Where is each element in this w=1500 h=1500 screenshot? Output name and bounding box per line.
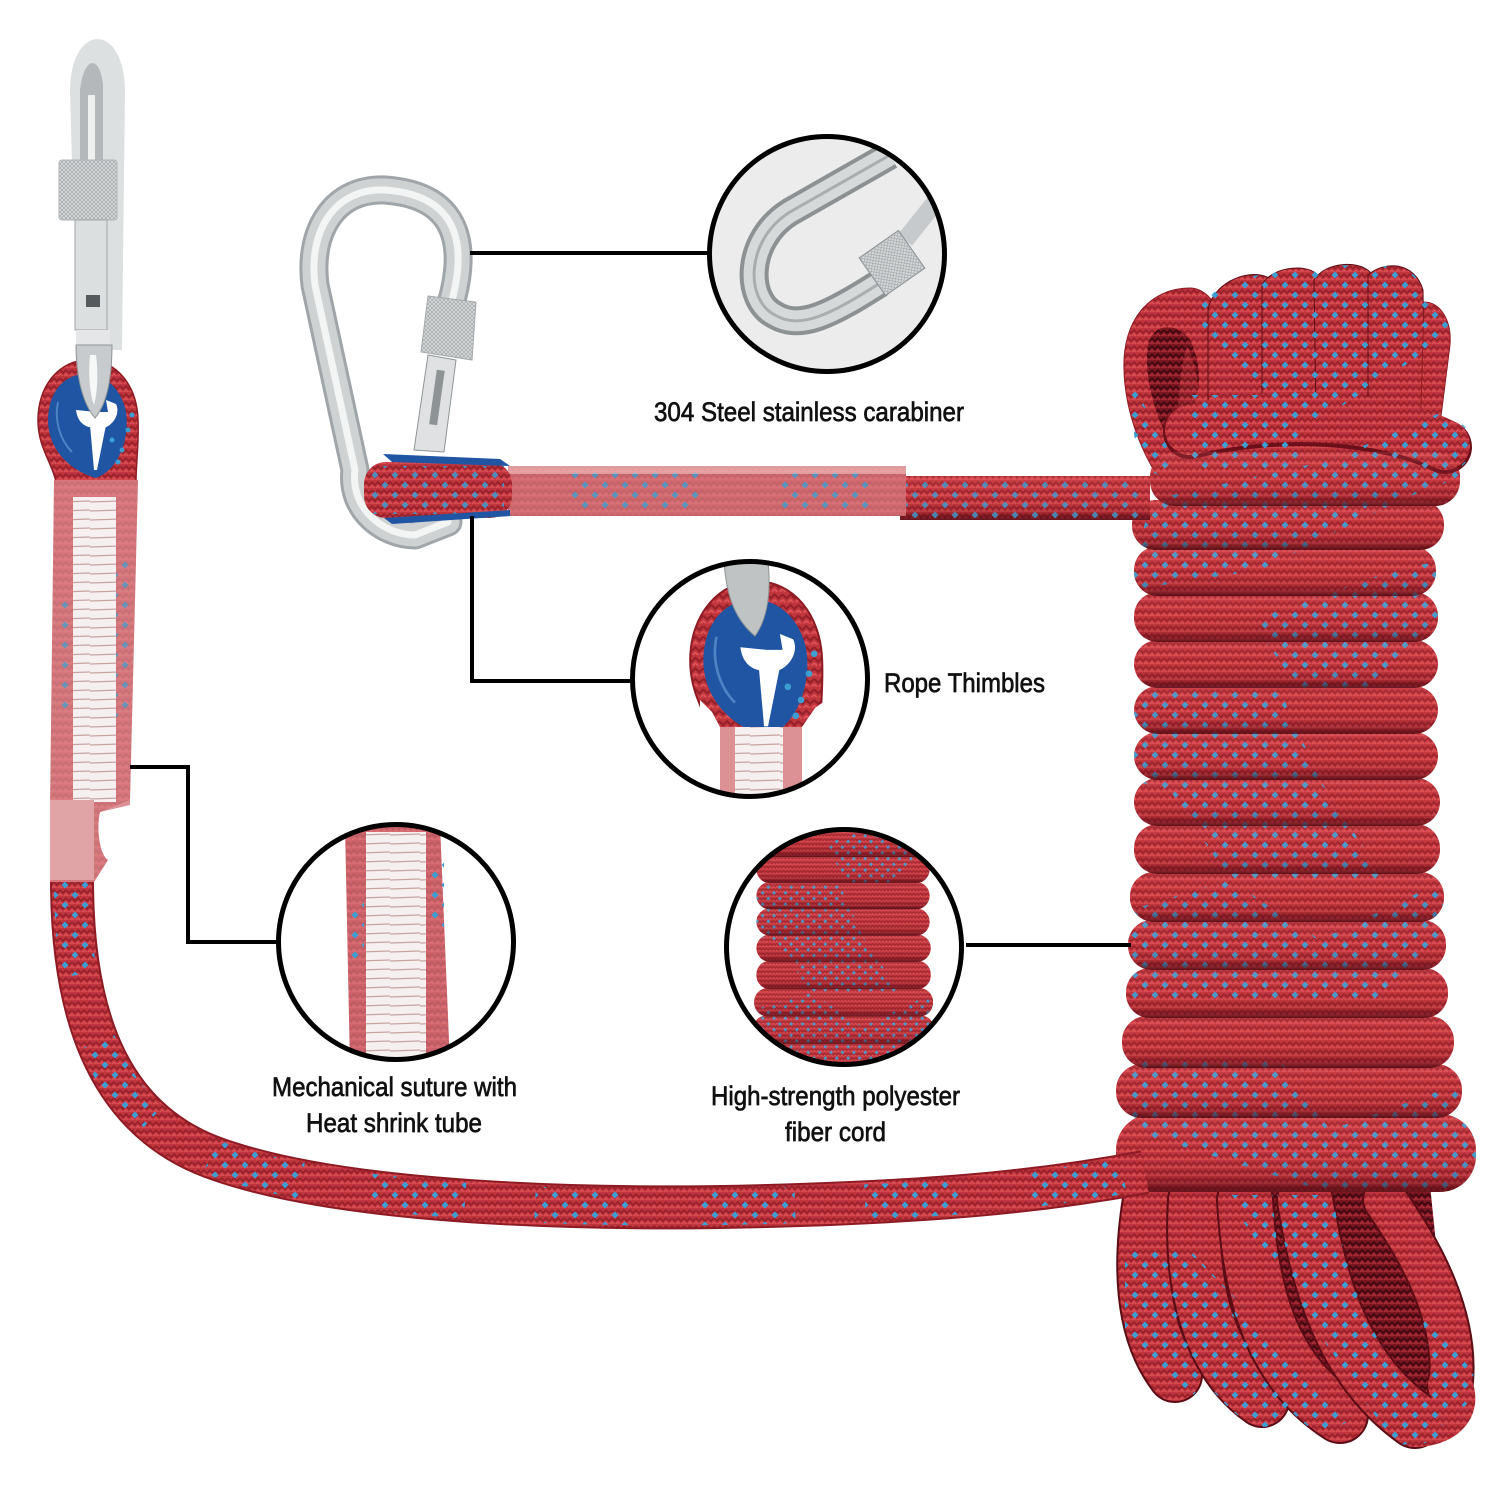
top wrap bbox=[1175, 417, 1445, 470]
label: cord: fiber cord bbox=[785, 1117, 886, 1147]
label: suture bbox=[272, 1072, 517, 1138]
inset: rope thimble detail bbox=[630, 560, 870, 802]
left thimble bbox=[38, 345, 138, 482]
lower rope running to coil bbox=[72, 880, 1145, 1207]
rope end at upper thimble bbox=[364, 454, 512, 524]
carabiner: left bbox=[59, 39, 125, 350]
coil wraps bbox=[1116, 452, 1476, 1192]
leader line: thimble bbox=[472, 516, 632, 681]
wrap shading bbox=[1116, 452, 1476, 1192]
left heat shrink sleeve with stitching bbox=[50, 480, 138, 882]
leader line: carabiner bbox=[470, 251, 708, 255]
inset: cord detail bbox=[724, 827, 964, 1067]
coil bottom strands bbox=[1144, 1185, 1453, 1425]
upper heat shrink sleeve bbox=[508, 466, 906, 516]
inset: carabiner detail bbox=[707, 134, 947, 374]
carabiner: upper bbox=[314, 190, 476, 535]
leader line: cord bbox=[966, 943, 1131, 947]
label: carabiner: 304 Steel stainless carabiner bbox=[654, 397, 964, 427]
rope coil bbox=[1116, 262, 1480, 1450]
carabiner body bbox=[314, 190, 458, 535]
label: thimbles: Rope Thimbles bbox=[884, 668, 1045, 698]
inset: stitched suture detail bbox=[270, 820, 520, 1070]
blue fleck bands bbox=[1125, 262, 1480, 1450]
label: cord bbox=[711, 1081, 960, 1147]
carabiner gate bbox=[414, 296, 476, 452]
leader line: suture bbox=[130, 767, 277, 942]
label: suture: Heat shrink tube bbox=[306, 1108, 482, 1138]
label: cord: High-strength polyester bbox=[711, 1081, 960, 1111]
upper rope running to coil bbox=[900, 476, 1150, 520]
coil top loops bbox=[1124, 264, 1450, 480]
label: suture: Mechanical suture with bbox=[272, 1072, 517, 1102]
